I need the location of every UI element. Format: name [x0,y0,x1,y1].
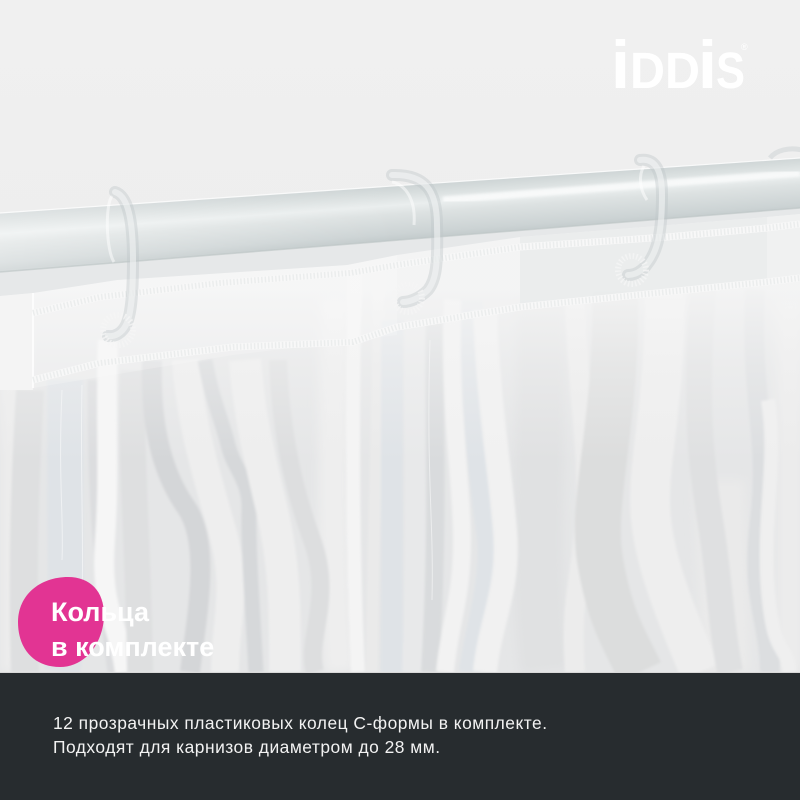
heading [51,597,214,662]
hem folds [32,293,34,388]
logo: IDDIS: i [611,27,630,103]
curtain sheet [0,200,800,672]
ring 2 [392,175,437,312]
body text: Подходят для карнизов диаметром до 28 мм. [53,736,441,756]
heading: Кольца [51,597,149,627]
wave bands [10,356,780,672]
ring 1 [103,192,133,345]
logo: IDDIS [611,27,748,103]
icon: pink blob [18,577,104,667]
logo: IDDIS: D [665,42,700,99]
heading: в комплекте [51,632,214,662]
body text: 12 прозрачных пластиковых колец С-формы в комплекте. [53,713,548,733]
ring 3 [618,160,662,284]
body text [53,713,548,756]
stitched hem lines [33,224,800,380]
logo: IDDIS: ® [741,42,748,52]
soft wide bands [326,436,348,666]
thin light seams [61,340,432,600]
shade under the rod [0,205,800,310]
logo: IDDIS: D [630,42,665,99]
logo: IDDIS: S [716,42,745,99]
logo: IDDIS: i [698,27,717,103]
panel: dark caption [0,672,800,800]
curtain rod [0,158,800,272]
whiter zone near the hem [34,237,800,402]
ring 4 [770,149,800,158]
